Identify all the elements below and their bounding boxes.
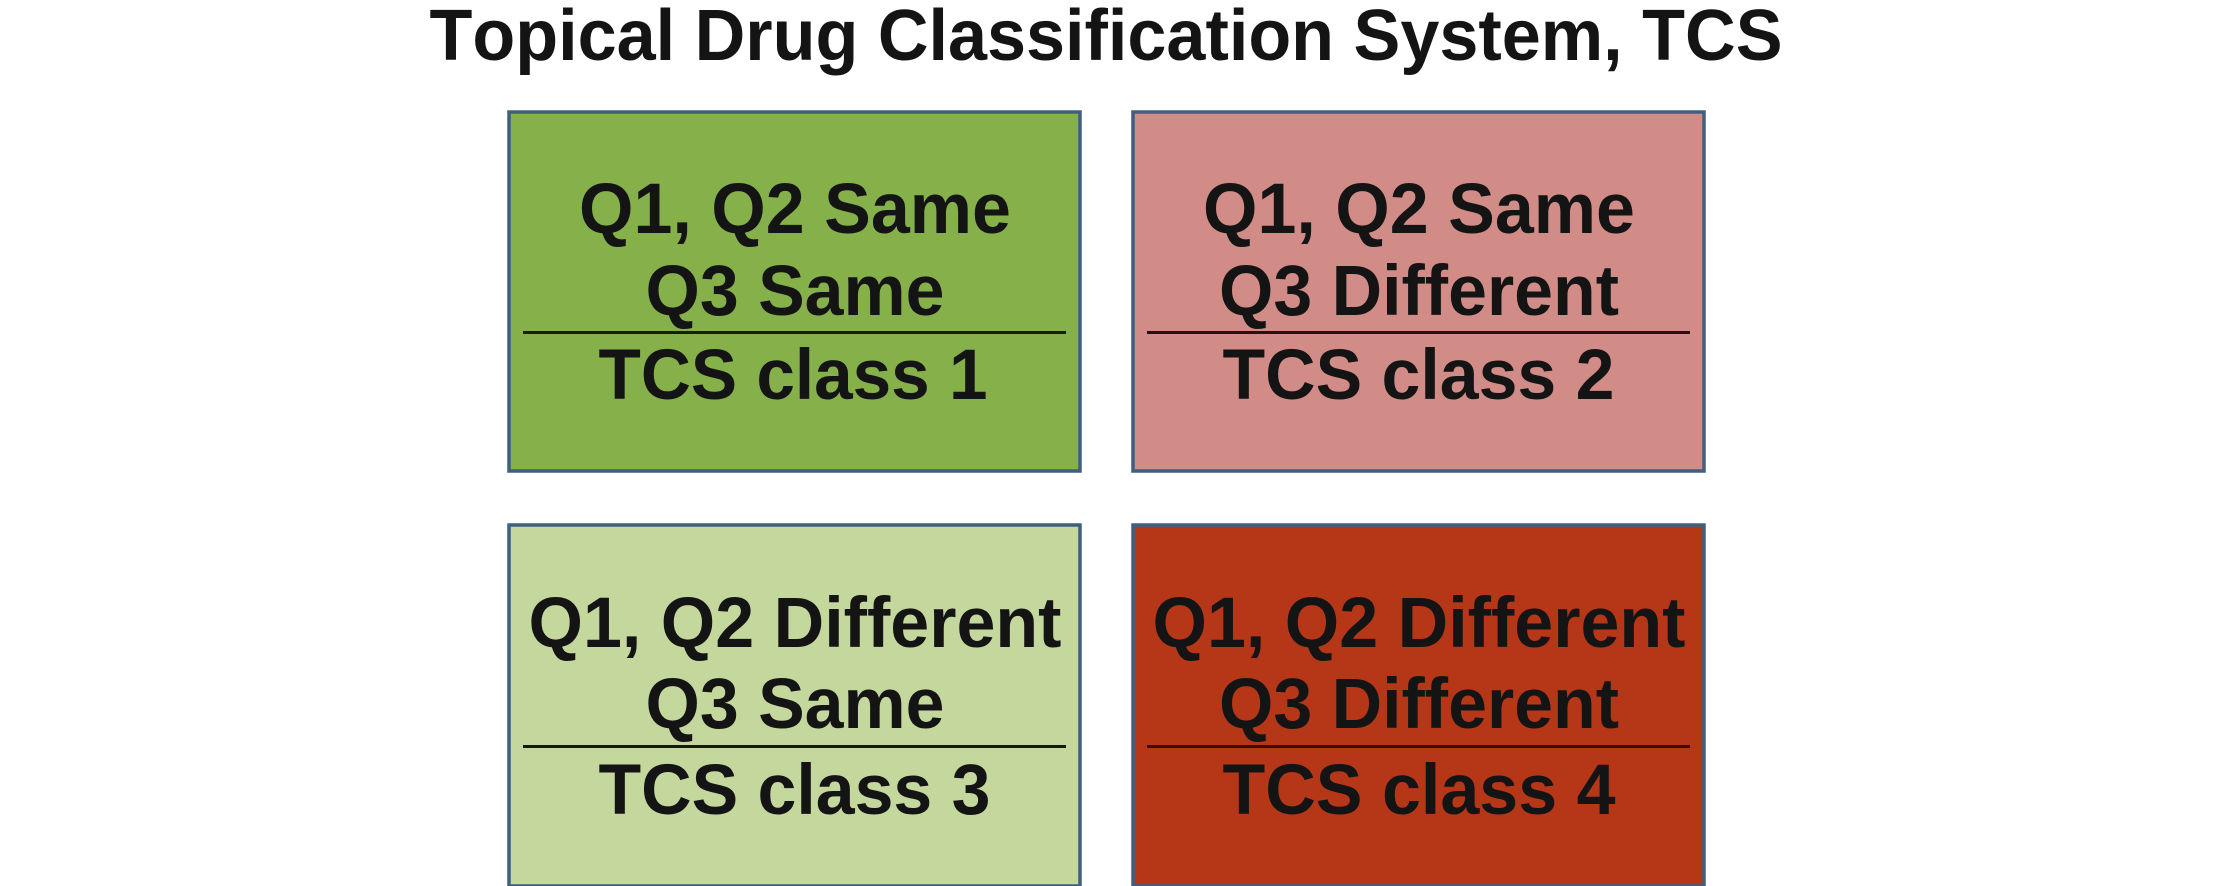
panel: TCS class 1: Q1, Q2 Same	[579, 169, 1011, 249]
panel: TCS class 4: TCS class 4	[1222, 750, 1616, 830]
panel: TCS class 4: Q1, Q2 Different	[1152, 583, 1686, 663]
panel: TCS class 2	[1133, 112, 1704, 471]
panel: TCS class 3: Q3 Same	[646, 664, 944, 744]
panel: TCS class 1	[509, 112, 1080, 471]
panel: TCS class 2: Q1, Q2 Same	[1203, 169, 1635, 249]
panel: TCS class 2: TCS class 2	[1222, 335, 1614, 415]
panel: TCS class 4: Q3 Different	[1219, 664, 1619, 744]
panel: TCS class 2: Q3 Different	[1219, 251, 1619, 331]
panel: TCS class 1: Q3 Same	[646, 251, 944, 331]
panel: TCS class 3	[509, 525, 1080, 886]
panel: TCS class 3: Q1, Q2 Different	[528, 583, 1062, 663]
panel: TCS class 4	[1133, 525, 1704, 886]
panel: TCS class 3: TCS class 3	[598, 750, 990, 830]
panel: TCS class 1: TCS class 1	[598, 335, 988, 415]
